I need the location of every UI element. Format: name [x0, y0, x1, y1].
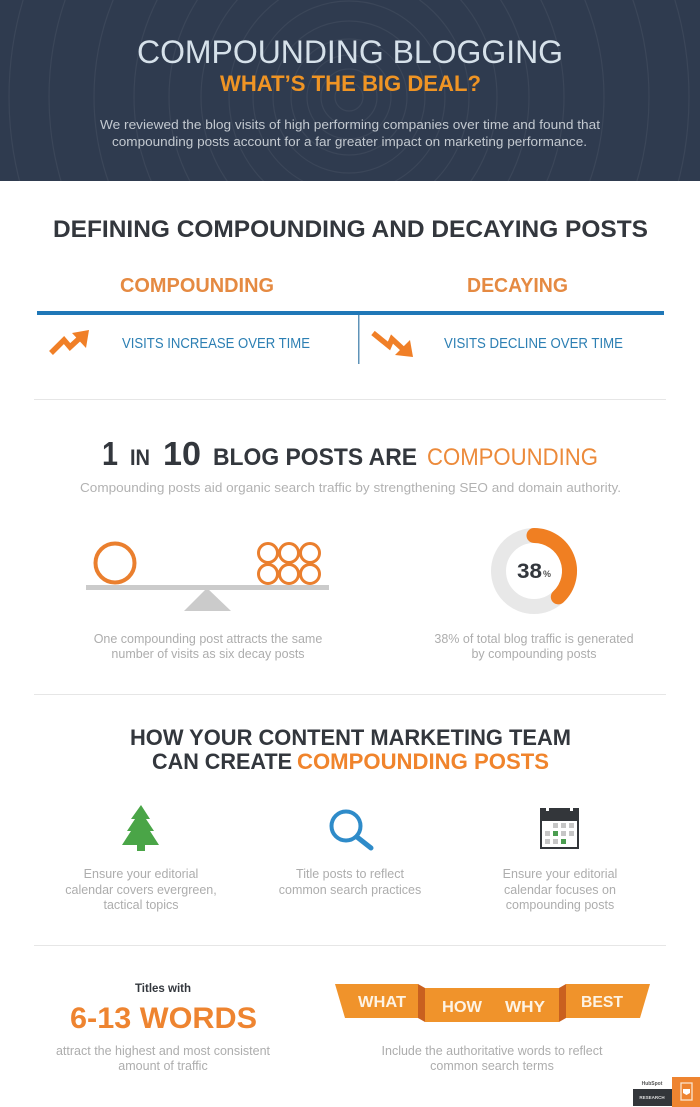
caption: calendar: calendar focuses on [504, 883, 616, 897]
ribbon: authoritative words: BEST [581, 994, 623, 1011]
logo: source badge: RESEARCH [639, 1095, 665, 1100]
heading: 1 in 10: 10 [163, 435, 201, 472]
caption: evergreen: tactical topics [103, 898, 179, 912]
caption: title posts [279, 867, 421, 897]
label: decaying: DECAYING [467, 275, 568, 297]
caption: calendar: Ensure your editorial [503, 867, 617, 881]
ribbon: authoritative words: WHAT [358, 994, 406, 1011]
description: organic search: Compounding posts aid organic search traffic by strengthening SEO and domain authority. [80, 480, 621, 495]
intro text: We reviewed the blog visits of high performing companies over time and found that [100, 117, 600, 132]
heading: 1 in 10: IN [130, 445, 150, 470]
caption: evergreen: Ensure your editorial [84, 867, 198, 881]
chart: balance scale [86, 544, 329, 611]
chart: 38 percent donut: 38 [517, 560, 542, 583]
panel: compounding vs decaying [37, 275, 664, 364]
heading: 1 in 10: 1 [102, 435, 118, 472]
subtitle: WHAT’S THE BIG DEAL? [220, 71, 481, 96]
caption: evergreen [65, 867, 217, 912]
caption: traffic: attract the highest and most consistent [56, 1044, 271, 1058]
caption: title posts: common search practices [279, 883, 421, 897]
caption: calendar: compounding posts [506, 898, 614, 912]
header panel [0, 0, 700, 437]
heading: how your team [130, 725, 571, 774]
caption: traffic [56, 1044, 271, 1073]
caption: evergreen: calendar covers evergreen, [65, 883, 217, 897]
heading: 1 in 10: COMPOUNDING [427, 444, 598, 471]
icon: falling arrow [373, 333, 413, 357]
icon: tree [122, 805, 159, 851]
caption: authoritative words: common search terms [430, 1059, 554, 1073]
heading: how your team: CAN CREATE [152, 749, 292, 774]
text: visits decline: VISITS DECLINE OVER TIME [444, 336, 623, 352]
caption: traffic: amount of traffic [118, 1059, 208, 1073]
caption: title posts: Title posts to reflect [296, 867, 404, 881]
heading: how your team: COMPOUNDING POSTS [297, 749, 549, 774]
caption: donut: 38% of total blog traffic is generated [434, 632, 634, 646]
stat: 6-13 words: 6-13 WORDS [70, 1002, 257, 1035]
ribbon: authoritative words: HOW [442, 999, 483, 1016]
ribbon: authoritative words: WHY [505, 999, 545, 1016]
caption: scale: One compounding post attracts the same [94, 632, 322, 646]
chart: 38 percent donut: % [543, 569, 551, 579]
caption: calendar [503, 867, 617, 912]
title: COMPOUNDING BLOGGING [137, 34, 563, 70]
heading: how your team: HOW YOUR CONTENT MARKETING TEAM [130, 725, 571, 750]
icon: rising arrow [51, 330, 89, 353]
chart: 38 percent donut [498, 536, 570, 606]
ribbon: authoritative words [335, 984, 650, 1022]
caption: authoritative words: Include the authoritative words to reflect [382, 1044, 603, 1058]
heading: 1 in 10: BLOG POSTS ARE [213, 444, 417, 471]
heading: defining posts: DEFINING COMPOUNDING AND DECAYING POSTS [53, 216, 648, 243]
icon: calendar [540, 807, 579, 849]
intro text [100, 117, 600, 149]
icon: magnifying glass [332, 812, 371, 848]
heading: 1 in 10 [102, 435, 598, 472]
label: compounding: COMPOUNDING [120, 275, 274, 297]
text: titles with: Titles with [135, 983, 191, 995]
caption: donut: by compounding posts [471, 647, 597, 661]
caption: scale [94, 632, 322, 661]
caption: donut [434, 632, 634, 661]
intro text: compounding posts account for a far greater impact on marketing performance. [112, 134, 587, 149]
text: visits increase: VISITS INCREASE OVER TIME [122, 336, 310, 352]
caption: authoritative words [382, 1044, 603, 1073]
logo: source badge [633, 1077, 700, 1107]
caption: scale: number of visits as six decay posts [111, 647, 305, 661]
logo: source badge: HubSpot [642, 1081, 663, 1087]
